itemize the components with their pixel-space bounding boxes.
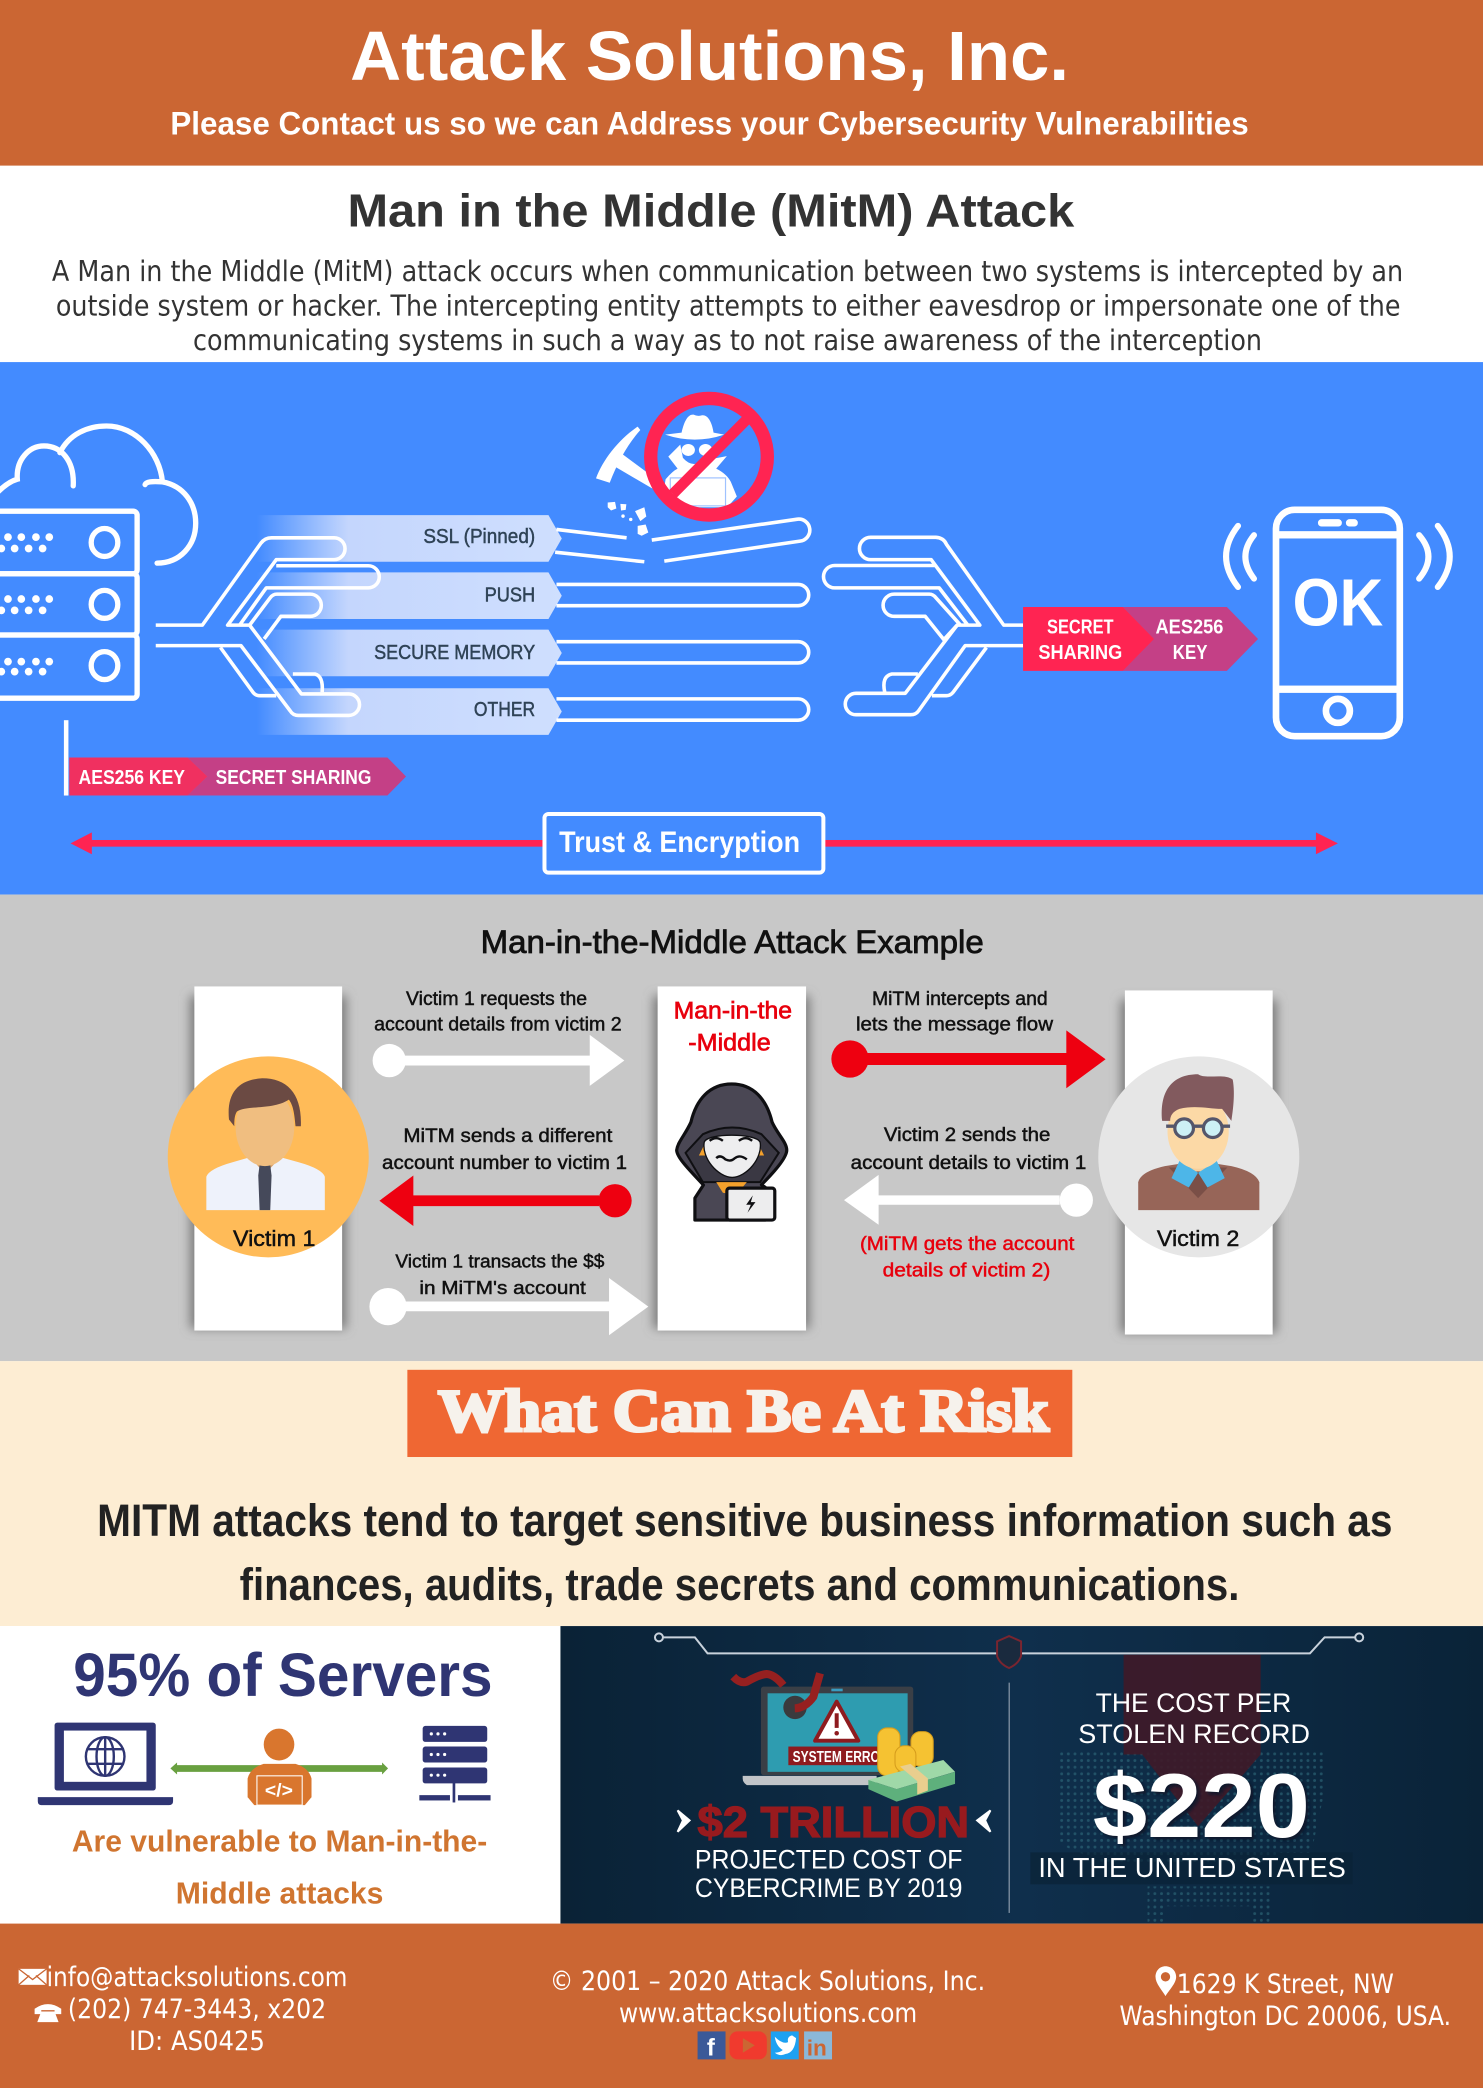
tags: AES256 key and secret sharing: SECRET SHARING <box>216 767 371 789</box>
subtitle: Please Contact us so we can Address your Cybersecurity Vulnerabilities <box>170 105 1249 141</box>
icon: map pin <box>1156 1966 1176 1996</box>
icon: cloud <box>0 426 196 563</box>
heading: attack example: Man-in-the-Middle Attack Example <box>481 924 984 960</box>
arrow: MiTM intercepts <box>831 989 1106 1088</box>
intro paragraph <box>52 254 1403 357</box>
copyright and website <box>550 1966 985 2029</box>
arrow: victim 1 requests: account details from victim 2 <box>374 1014 622 1035</box>
stat heading: 95% of Servers <box>73 1641 493 1709</box>
tags: secret sharing and AES256 key: KEY <box>1173 642 1207 664</box>
stat: 220 dollars per record: $220 <box>1093 1756 1310 1857</box>
arrow: victim 2 sends details: Victim 2 sends the <box>884 1125 1050 1146</box>
stat: 2 trillion: CYBERCRIME BY 2019 <box>695 1873 962 1903</box>
social icons <box>698 2031 832 2061</box>
column: man in the middle <box>658 986 806 1331</box>
copyright and website: www.attacksolutions.com <box>619 1998 917 2029</box>
arrow: victim 2 sends details: details of victim 2) <box>883 1261 1050 1282</box>
ribbon: secure memory: SECURE MEMORY <box>374 641 535 664</box>
section heading: Man in the Middle (MitM) Attack <box>347 184 1074 236</box>
arrow: MiTM sends different number <box>379 1126 632 1226</box>
title: Attack Solutions, Inc. <box>350 17 1069 95</box>
risk heading <box>407 1370 1072 1457</box>
panel: what can be at risk <box>0 1361 1483 1626</box>
panel: attack example <box>0 895 1483 1361</box>
ribbon: secure memory <box>257 630 562 676</box>
arrow: victim 1 transacts <box>369 1250 648 1335</box>
divider <box>1009 1683 1010 1913</box>
risk heading: What Can Be At Risk <box>438 1378 1050 1444</box>
stat: 2 trillion: $2 TRILLION <box>698 1798 969 1847</box>
label box: trust and encryption: Trust & Encryption <box>559 826 800 859</box>
arrow: MiTM intercepts: MiTM intercepts and <box>872 989 1048 1010</box>
footer <box>0 1924 1483 2088</box>
header banner <box>0 0 1483 166</box>
background arrow <box>1124 1655 1261 1826</box>
arrow: victim 2 sends details <box>844 1125 1093 1282</box>
avatar: victim 2: Victim 2 <box>1157 1226 1239 1251</box>
arrow: victim 2 sends details: (MiTM gets the account <box>860 1234 1075 1255</box>
label box: trust and encryption <box>544 814 823 873</box>
contact details: info@attacksolutions.com <box>47 1962 347 1993</box>
ribbon: push: PUSH <box>485 584 535 607</box>
icon: phone showing OK <box>1226 510 1450 736</box>
icon: developer: </> <box>265 1779 293 1800</box>
icon: masked man in the middle: Man-in-the <box>674 997 792 1024</box>
tags: AES256 key and secret sharing: AES256 KEY <box>79 767 185 789</box>
ribbon: SSL pinned: SSL (Pinned) <box>423 525 535 548</box>
arrow: trust and encryption span <box>71 832 1338 854</box>
icon: telephone <box>35 2004 61 2022</box>
copyright and website: © 2001 – 2020 Attack Solutions, Inc. <box>550 1966 985 1997</box>
stat: 220 dollars per record: STOLEN RECORD <box>1078 1719 1310 1749</box>
right channel fork <box>824 537 1023 715</box>
tags: secret sharing and AES256 key: SHARING <box>1038 642 1122 664</box>
panel: encryption diagram <box>0 362 1483 895</box>
circuit line <box>655 1633 1363 1653</box>
background dotted map <box>1058 1751 1325 1924</box>
arrow: green connection <box>170 1763 388 1775</box>
stat: 220 dollars per record: THE COST PER <box>1096 1688 1291 1718</box>
stat: 220 dollars per record: IN THE UNITED STATES <box>1038 1852 1346 1883</box>
icon: server <box>419 1726 491 1802</box>
icon: laptop <box>38 1723 173 1805</box>
icon: hacker <box>663 415 737 507</box>
icon: developer <box>248 1729 312 1805</box>
column shadows <box>190 996 1277 1333</box>
risk statement: finances, audits, trade secrets and communications. <box>240 1559 1239 1610</box>
arrow: victim 1 transacts: Victim 1 transacts the $$ <box>395 1250 605 1271</box>
arrow: MiTM sends different number: account number to victim 1 <box>382 1153 627 1174</box>
avatar: victim 1 <box>168 1056 369 1257</box>
column: victim 1 <box>194 986 342 1331</box>
arrow: victim 1 transacts: in MiTM's account <box>419 1277 587 1298</box>
stat caption: Middle attacks <box>176 1877 383 1911</box>
icon: system error laptop <box>733 1673 955 1802</box>
icon: server rack <box>0 511 137 698</box>
stat: 220 dollars per record <box>1030 1688 1353 1884</box>
stat: 2 trillion <box>678 1798 990 1903</box>
icon: envelope <box>19 1969 47 1985</box>
stat: 2 trillion: PROJECTED COST OF <box>695 1844 962 1874</box>
intro paragraph: communicating systems in such a way as to not raise awareness of the interception <box>193 323 1262 357</box>
stat caption <box>72 1825 487 1911</box>
icon: shield <box>997 1636 1021 1668</box>
icon: masked man in the middle <box>674 997 792 1220</box>
avatar: victim 2 <box>1098 1056 1299 1257</box>
icon: phone showing OK: OK <box>1293 567 1383 641</box>
arrow: victim 1 requests: Victim 1 requests the <box>406 989 587 1010</box>
arrow: MiTM intercepts: lets the message flow <box>856 1014 1053 1035</box>
tags: secret sharing and AES256 key <box>1023 607 1258 671</box>
avatar: victim 1: Victim 1 <box>233 1226 316 1251</box>
ribbon: other: OTHER <box>474 698 535 721</box>
column: victim 2 <box>1125 990 1273 1335</box>
tags: secret sharing and AES256 key: AES256 <box>1156 617 1223 639</box>
contact details <box>19 1962 347 2057</box>
tags: secret sharing and AES256 key: SECRET <box>1047 617 1114 639</box>
icon: system error laptop: SYSTEM ERROR <box>793 1749 889 1766</box>
icon: prohibition sign <box>651 398 767 515</box>
contact details: ID: AS0425 <box>129 2026 265 2057</box>
arrow: victim 2 sends details: account details to victim 1 <box>851 1153 1086 1174</box>
panel: cybercrime cost <box>560 1626 1483 1924</box>
stat caption: Are vulnerable to Man-in-the- <box>72 1825 487 1859</box>
stat: 220 dollars per record: $220 <box>1096 1759 1313 1860</box>
arrow: victim 1 requests <box>373 989 624 1086</box>
social icons: f <box>707 2034 716 2061</box>
ribbon: SSL pinned <box>257 515 562 562</box>
address: 1629 K Street, NW <box>1177 1969 1394 2000</box>
icon: pickaxe <box>596 427 656 536</box>
left channel fork <box>156 538 379 715</box>
contact details: (202) 747-3443, x202 <box>68 1994 326 2025</box>
tags: AES256 key and secret sharing <box>64 720 406 796</box>
icon: blocked hacker with pickaxe <box>596 398 767 536</box>
ribbon: other <box>257 688 562 735</box>
icon: masked man in the middle: -Middle <box>688 1029 771 1056</box>
risk statement <box>97 1495 1392 1610</box>
social icons: in <box>807 2035 827 2060</box>
intro section <box>0 166 1483 362</box>
address <box>1120 1966 1451 2032</box>
ribbon: push <box>257 572 562 619</box>
arrow: MiTM sends different number: MiTM sends a different <box>403 1126 613 1147</box>
panel: 95 percent of servers <box>0 1626 560 1924</box>
channel tubes <box>555 519 810 720</box>
